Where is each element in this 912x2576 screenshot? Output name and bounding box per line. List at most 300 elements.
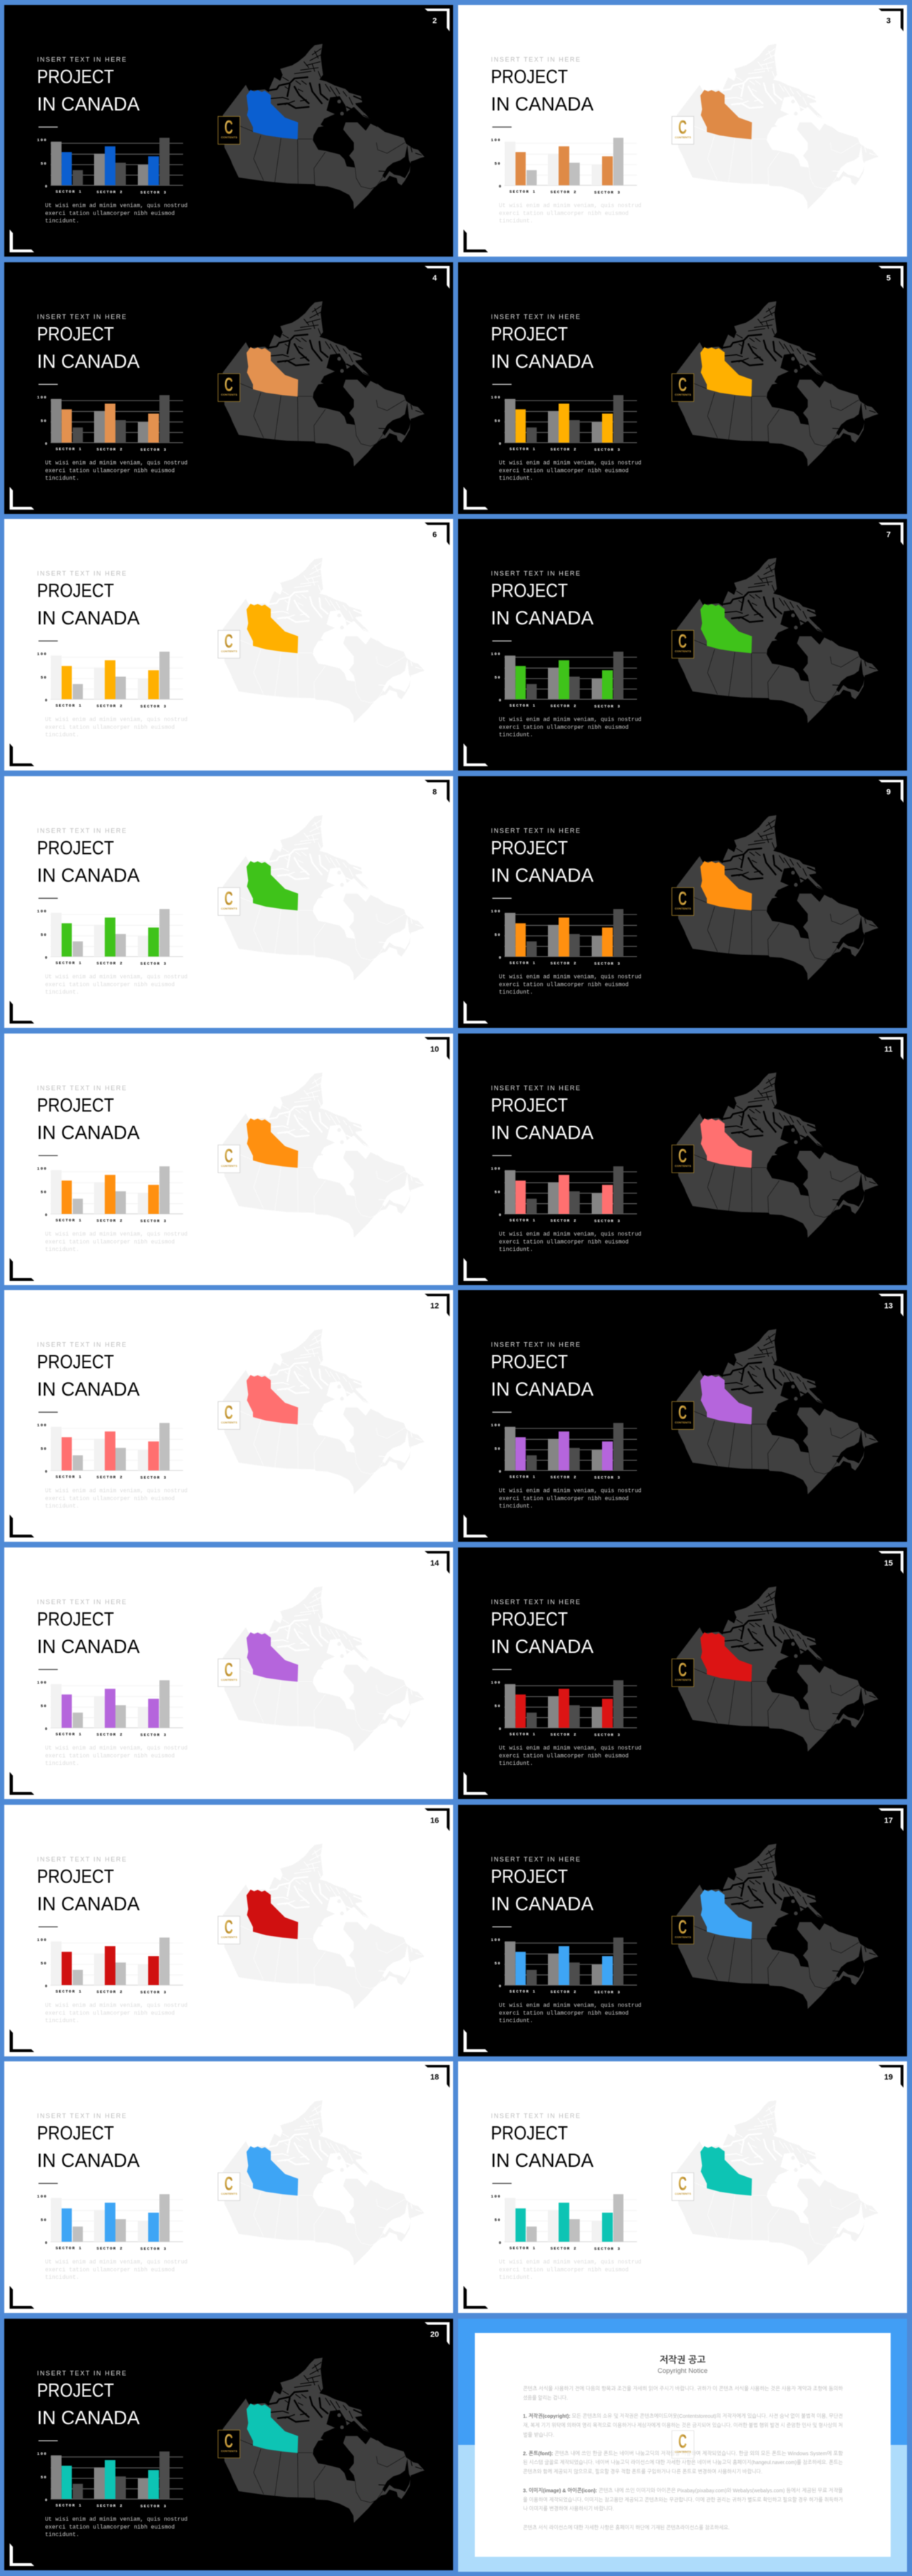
corner brackets and page number (10, 266, 450, 510)
body text (45, 2516, 188, 2538)
title: IN CANADA (491, 865, 594, 886)
title: IN CANADA (491, 2150, 594, 2171)
corner brackets and page number: 8 (432, 788, 437, 797)
eyebrow: INSERT TEXT IN HERE (37, 570, 126, 577)
copyright body text: 1. 저작권(copyright): 모든 콘텐츠의 소유 및 저작권은 콘텐츠에이드어웃(Contentstoreout)의 저작자에게 있습니다. 사전 승낙 없이 불법적 이용, 무단전 (523, 2413, 843, 2419)
bar chart (37, 1680, 183, 1738)
corner brackets and page number (10, 522, 450, 766)
title (37, 580, 140, 629)
body text (499, 1745, 642, 1767)
title: PROJECT (491, 323, 568, 344)
bar chart: 100 (37, 395, 47, 400)
body text (499, 1231, 642, 1253)
title: PROJECT (37, 66, 114, 88)
title (37, 1094, 140, 1143)
corner brackets and page number (463, 1294, 903, 1537)
bar chart: SECTOR 1 (56, 190, 82, 194)
title: IN CANADA (37, 607, 140, 629)
title: IN CANADA (37, 1893, 140, 1915)
logo badge: C (678, 116, 687, 138)
bar chart: 100 (491, 1680, 501, 1685)
logo badge: CONTENTS (675, 1421, 691, 1424)
bar chart: 50 (494, 1190, 501, 1195)
title (37, 323, 140, 372)
title: IN CANADA (491, 1636, 594, 1657)
bar chart: SECTOR 3 (140, 961, 167, 967)
body text: exerci tation ullamcorper nibh euismod (45, 468, 175, 474)
body text (499, 460, 642, 482)
corner brackets and page number: 9 (886, 788, 891, 797)
logo badge (218, 116, 240, 144)
logo badge (218, 2173, 240, 2201)
logo badge: CONTENTS (675, 135, 691, 139)
body text: tincidunt. (45, 2532, 79, 2538)
bar chart: SECTOR 3 (140, 1732, 167, 1738)
copyright body text: 재, 복제 기기 위탁에 의하여 영리 목적으로 이용하거나 제삼자에게 이용하는 것은 금지되어 있습니다. 이러한 불법 행위 발견 시 준엄한 민사 및 형사상의 처 (523, 2422, 843, 2428)
title: IN CANADA (37, 1636, 140, 1657)
map of Canada with highlighted region (223, 2101, 425, 2266)
panel: slide 15 dark red (458, 1547, 907, 1799)
title: PROJECT (37, 323, 114, 344)
corner brackets and page number (10, 9, 450, 252)
logo badge: C (678, 2173, 687, 2195)
eyebrow: INSERT TEXT IN HERE (37, 313, 126, 320)
bar chart: SECTOR 1 (56, 1732, 82, 1736)
title: IN CANADA (37, 1379, 140, 1400)
corner brackets and page number: 4 (432, 274, 437, 282)
bar chart: 0 (45, 698, 48, 703)
logo badge: C (678, 1145, 687, 1166)
title: PROJECT (37, 580, 114, 602)
bar chart: SECTOR 3 (594, 1218, 621, 1223)
bar chart: SECTOR 1 (509, 2246, 536, 2251)
title rule (38, 1155, 58, 1156)
logo badge (672, 1402, 694, 1430)
bar chart: 100 (491, 2194, 501, 2199)
eyebrow: INSERT TEXT IN HERE (491, 1855, 580, 1863)
bar chart (491, 1423, 637, 1480)
body text (499, 974, 642, 996)
bar chart: SECTOR 1 (56, 1217, 82, 1222)
logo badge (672, 1916, 694, 1944)
body text: tincidunt. (499, 1247, 533, 1253)
bar chart: SECTOR 3 (140, 2247, 167, 2252)
bar chart: SECTOR 2 (550, 447, 576, 452)
bar chart (491, 651, 637, 709)
bar chart: SECTOR 1 (56, 961, 82, 965)
corner brackets and page number (463, 1551, 903, 1795)
bar chart: 50 (494, 418, 501, 423)
bar chart: SECTOR 1 (509, 446, 536, 451)
bar chart: 100 (37, 1166, 47, 1171)
map of Canada with highlighted region (677, 301, 879, 466)
title: IN CANADA (37, 1122, 140, 1143)
logo badge (672, 631, 694, 659)
corner brackets and page number (463, 9, 903, 252)
title rule (492, 898, 512, 899)
bar chart: SECTOR 2 (550, 1218, 576, 1223)
title: PROJECT (37, 1609, 114, 1630)
corner brackets and page number (463, 780, 903, 1024)
copyright body text: 콘텐츠 서식을 사용하기 전에 다음의 항목과 조건을 자세히 읽어 주시기 바랍니다. 귀하가 이 콘텐츠 서식을 사용하는 것은 사용자 계약과 조항에 동의하 (523, 2386, 844, 2392)
copyright body text: 벌을 받습니다. (523, 2432, 554, 2438)
map of Canada with highlighted region (677, 44, 879, 209)
bar chart: SECTOR 2 (550, 704, 576, 709)
bar chart (491, 909, 637, 967)
bar chart: SECTOR 2 (550, 1475, 576, 1480)
title rule (38, 1412, 58, 1413)
bar chart: 0 (499, 441, 502, 446)
logo badge: CONTENTS (675, 393, 691, 396)
logo badge (672, 2431, 694, 2458)
body text (45, 1231, 188, 1253)
corner brackets and page number: 6 (432, 531, 437, 540)
body text (499, 2002, 642, 2024)
body text: exerci tation ullamcorper nibh euismod (45, 2525, 175, 2530)
logo badge: C (224, 373, 233, 395)
bar chart: 100 (491, 138, 501, 143)
body text: tincidunt. (499, 475, 533, 482)
eyebrow: INSERT TEXT IN HERE (37, 1598, 126, 1605)
bar chart: SECTOR 2 (550, 1732, 576, 1737)
title rule (492, 1669, 512, 1670)
title: PROJECT (37, 1351, 114, 1373)
bar chart: SECTOR 1 (509, 961, 536, 965)
map of Canada with highlighted region (223, 1072, 425, 1237)
bar chart: 100 (37, 1937, 47, 1942)
bar chart: SECTOR 2 (97, 704, 123, 709)
eyebrow: INSERT TEXT IN HERE (37, 827, 126, 834)
bar chart: SECTOR 1 (509, 190, 536, 194)
bar chart: 100 (37, 1423, 47, 1428)
body text: Ut wisi enim ad minim veniam, quis nostrud (45, 974, 188, 981)
bar chart: 50 (41, 418, 47, 423)
title (491, 66, 594, 115)
panel: slide 10 light bright orange (4, 1034, 453, 1285)
bar chart: 50 (494, 2217, 501, 2222)
title rule (492, 1926, 512, 1927)
body text: tincidunt. (45, 2018, 79, 2024)
title (491, 580, 594, 629)
bar chart: 0 (45, 1726, 48, 1731)
logo badge (672, 887, 694, 915)
logo badge: CONTENTS (675, 2192, 691, 2195)
title: PROJECT (491, 66, 568, 88)
bar chart: 50 (41, 1704, 47, 1709)
panel: slide 20 dark teal (4, 2319, 453, 2570)
map of Canada with highlighted region (677, 1843, 879, 2009)
eyebrow: INSERT TEXT IN HERE (37, 1084, 126, 1091)
logo badge (672, 373, 694, 401)
body text: tincidunt. (499, 2274, 533, 2281)
logo badge: CONTENTS (221, 1164, 237, 1168)
bar chart: SECTOR 1 (56, 2503, 82, 2508)
copyright heading: Copyright Notice (658, 2367, 708, 2375)
bar chart: 0 (499, 698, 502, 703)
bar chart: 50 (41, 932, 47, 937)
body text: exerci tation ullamcorper nibh euismod (45, 725, 175, 731)
bar chart: SECTOR 2 (550, 961, 576, 966)
body text: Ut wisi enim ad minim veniam, quis nostrud (499, 2260, 642, 2266)
body text: exerci tation ullamcorper nibh euismod (499, 1753, 629, 1759)
bar chart: 0 (499, 1984, 502, 1989)
copyright heading (658, 2354, 708, 2375)
logo badge: C (678, 631, 687, 652)
bar chart: SECTOR 2 (97, 190, 123, 195)
body text (45, 1488, 188, 1510)
bar chart: SECTOR 3 (594, 704, 621, 709)
copyright body text: 나 이미지를 변경하여 사용하시기 바랍니다. (523, 2505, 614, 2512)
map of Canada with highlighted region (223, 558, 425, 723)
body text: Ut wisi enim ad minim veniam, quis nostrud (45, 1745, 188, 1752)
corner brackets and page number (10, 1037, 450, 1281)
bar chart (37, 138, 183, 195)
logo badge: C (224, 1402, 233, 1423)
bar chart: 0 (45, 1212, 48, 1217)
title rule (38, 641, 58, 642)
body text: Ut wisi enim ad minim veniam, quis nostrud (499, 202, 642, 210)
logo badge: CONTENTS (221, 1678, 237, 1681)
logo badge: C (678, 1402, 687, 1423)
eyebrow: INSERT TEXT IN HERE (491, 1084, 580, 1091)
bar chart: SECTOR 2 (550, 1989, 576, 1994)
body text: Ut wisi enim ad minim veniam, quis nostrud (499, 460, 642, 466)
bar chart: SECTOR 3 (594, 447, 621, 452)
body text: exerci tation ullamcorper nibh euismod (499, 1496, 629, 1503)
body text: exerci tation ullamcorper nibh euismod (499, 468, 629, 474)
body text (45, 2260, 188, 2281)
bar chart: SECTOR 1 (56, 704, 82, 709)
title: IN CANADA (37, 351, 140, 372)
body text: exerci tation ullamcorper nibh euismod (499, 2267, 629, 2274)
eyebrow: INSERT TEXT IN HERE (37, 1341, 126, 1349)
body text (45, 974, 188, 996)
title: PROJECT (37, 1094, 114, 1116)
bar chart: SECTOR 1 (56, 1475, 82, 1480)
corner brackets and page number (10, 780, 450, 1024)
copyright body text: 2. 폰트(font): 콘텐츠 내에 쓰인 한글 폰트는 네이버 나눔고딕의 저작물을 사용하여 제작되었습니다. 한글 외의 모든 폰트는 Windows System에 포함 (523, 2451, 844, 2457)
eyebrow: INSERT TEXT IN HERE (491, 2113, 580, 2120)
bar chart: SECTOR 3 (140, 447, 167, 452)
bar chart (37, 395, 183, 452)
title (37, 1865, 140, 1915)
bar chart (491, 2194, 637, 2252)
bar chart: SECTOR 3 (594, 1989, 621, 1994)
bar chart: 100 (37, 909, 47, 914)
bar chart: 100 (491, 395, 501, 400)
body text: tincidunt. (499, 1503, 533, 1510)
body text: exerci tation ullamcorper nibh euismod (45, 1239, 175, 1245)
bar chart: SECTOR 1 (56, 2246, 82, 2251)
title (37, 2123, 140, 2171)
bar chart: SECTOR 1 (509, 1217, 536, 1222)
title rule (38, 1926, 58, 1927)
bar chart: 100 (37, 1680, 47, 1685)
bar chart: 0 (45, 1469, 48, 1474)
panel: slide 17 dark sky blue (458, 1805, 907, 2056)
eyebrow: INSERT TEXT IN HERE (37, 1855, 126, 1863)
body text: Ut wisi enim ad minim veniam, quis nostrud (499, 2002, 642, 2009)
body text: tincidunt. (499, 989, 533, 996)
bar chart (37, 1423, 183, 1480)
body text: Ut wisi enim ad minim veniam, quis nostrud (45, 202, 188, 210)
title: PROJECT (491, 1865, 568, 1887)
bar chart: SECTOR 2 (97, 447, 123, 452)
panel: slide 9 dark bright orange (458, 776, 907, 1028)
body text: Ut wisi enim ad minim veniam, quis nostrud (499, 1231, 642, 1237)
logo badge: CONTENTS (221, 393, 237, 396)
body text: Ut wisi enim ad minim veniam, quis nostrud (45, 717, 188, 723)
title: IN CANADA (37, 2407, 140, 2428)
title rule (38, 898, 58, 899)
bar chart: SECTOR 3 (140, 1989, 167, 1994)
copyright body text: 셨음을 알리는 겁니다. (523, 2395, 568, 2401)
bar chart: SECTOR 3 (140, 704, 167, 709)
map of Canada with highlighted region (223, 1843, 425, 2009)
panel: slide 2 dark blue (4, 5, 453, 257)
bar chart: SECTOR 3 (140, 190, 167, 195)
bar chart: SECTOR 1 (56, 446, 82, 451)
bar chart: 50 (494, 675, 501, 680)
bar chart: 50 (494, 1446, 501, 1451)
map of Canada with highlighted region (223, 815, 425, 980)
bar chart: SECTOR 2 (550, 2246, 576, 2251)
logo badge (218, 631, 240, 659)
copyright body text: 콘텐츠와 함께 제공되지 않으므로, 필요할 경우 적합 폰트를 구입하거나 다른 폰트로 변경하여 사용하시기 바랍니다. (523, 2468, 762, 2475)
logo badge: C (678, 1916, 687, 1937)
title: PROJECT (491, 1351, 568, 1373)
body text: exerci tation ullamcorper nibh euismod (45, 211, 175, 217)
corner brackets and page number: 12 (430, 1302, 439, 1311)
bar chart: SECTOR 2 (97, 1732, 123, 1737)
body text: Ut wisi enim ad minim veniam, quis nostrud (45, 1231, 188, 1237)
body text: tincidunt. (45, 475, 79, 482)
panel: slide 8 light green (4, 776, 453, 1028)
bar chart: 100 (37, 2451, 47, 2456)
bar chart: SECTOR 2 (97, 1475, 123, 1480)
body text: exerci tation ullamcorper nibh euismod (499, 2010, 629, 2016)
bar chart (491, 1166, 637, 1223)
body text: tincidunt. (499, 218, 533, 225)
corner brackets and page number: 3 (886, 17, 891, 26)
bar chart: 100 (491, 1166, 501, 1171)
title (491, 323, 594, 372)
corner brackets and page number: 15 (884, 1560, 893, 1568)
logo badge (218, 1916, 240, 1944)
body text: Ut wisi enim ad minim veniam, quis nostrud (45, 2002, 188, 2009)
title rule (492, 383, 512, 385)
body text: exerci tation ullamcorper nibh euismod (499, 1239, 629, 1245)
logo badge: C (224, 887, 233, 909)
logo badge: C (224, 116, 233, 138)
corner brackets and page number: 14 (430, 1560, 440, 1568)
map of Canada with highlighted region (677, 1329, 879, 1495)
logo badge: C (678, 2431, 687, 2452)
bar chart: SECTOR 1 (509, 1732, 536, 1736)
title (37, 1351, 140, 1400)
title (491, 1865, 594, 1915)
panel: slide 18 light sky blue (4, 2061, 453, 2313)
bar chart: 50 (494, 1704, 501, 1709)
bar chart: 0 (499, 184, 502, 189)
logo badge (672, 1145, 694, 1173)
body text: exerci tation ullamcorper nibh euismod (45, 2010, 175, 2016)
map of Canada with highlighted region (223, 1587, 425, 1751)
logo badge: CONTENTS (675, 2450, 691, 2453)
bar chart: 0 (499, 1212, 502, 1217)
title: PROJECT (491, 1609, 568, 1630)
title rule (492, 127, 512, 128)
panel: slide 14 light purple (4, 1547, 453, 1799)
bar chart (37, 651, 183, 709)
bar chart: SECTOR 3 (140, 1218, 167, 1223)
panel: slide 6 light yellow (4, 519, 453, 771)
body text: Ut wisi enim ad minim veniam, quis nostrud (499, 717, 642, 723)
body text: Ut wisi enim ad minim veniam, quis nostrud (499, 974, 642, 981)
title: PROJECT (491, 838, 568, 859)
bar chart: SECTOR 3 (594, 961, 621, 967)
corner brackets and page number: 18 (430, 2073, 439, 2082)
title rule (492, 2183, 512, 2184)
logo badge: CONTENTS (675, 907, 691, 910)
body text: Ut wisi enim ad minim veniam, quis nostrud (45, 460, 188, 466)
map of Canada with highlighted region (677, 558, 879, 723)
bar chart: 50 (494, 1961, 501, 1966)
logo badge (672, 2173, 694, 2201)
title: PROJECT (37, 2123, 114, 2144)
logo badge: CONTENTS (221, 2192, 237, 2195)
map of Canada with highlighted region (677, 815, 879, 980)
body text: tincidunt. (45, 1761, 79, 1767)
body text: exerci tation ullamcorper nibh euismod (499, 982, 629, 988)
body text: tincidunt. (499, 1761, 533, 1767)
title rule (38, 383, 58, 385)
logo badge: C (224, 1659, 233, 1680)
logo badge (218, 1402, 240, 1430)
bar chart (491, 395, 637, 452)
logo badge (218, 2430, 240, 2458)
body text: exerci tation ullamcorper nibh euismod (45, 1496, 175, 1503)
bar chart: 100 (491, 1423, 501, 1428)
bar chart: 0 (45, 955, 48, 960)
eyebrow: INSERT TEXT IN HERE (491, 313, 580, 320)
bar chart (37, 1937, 183, 1994)
logo badge: CONTENTS (675, 649, 691, 653)
title rule (38, 1669, 58, 1670)
map of Canada with highlighted region (677, 1587, 879, 1751)
corner brackets and page number (10, 1294, 450, 1537)
title: IN CANADA (491, 1893, 594, 1915)
corner brackets and page number (10, 1551, 450, 1795)
eyebrow: INSERT TEXT IN HERE (491, 56, 580, 63)
corner brackets and page number: 20 (430, 2331, 439, 2339)
bar chart: SECTOR 2 (97, 2503, 123, 2508)
two-tone blue background (458, 2319, 907, 2572)
title (37, 838, 140, 886)
title (491, 1609, 594, 1657)
bar chart: 50 (41, 675, 47, 680)
body text: exerci tation ullamcorper nibh euismod (45, 2267, 175, 2274)
logo badge: C (678, 373, 687, 395)
logo badge: CONTENTS (221, 2449, 237, 2453)
bar chart: 100 (491, 909, 501, 914)
bar chart: 50 (41, 161, 47, 166)
logo badge: CONTENTS (675, 1935, 691, 1939)
bar chart: SECTOR 2 (97, 2246, 123, 2251)
bar chart (37, 2451, 183, 2509)
body text: tincidunt. (45, 2274, 79, 2281)
title: PROJECT (37, 2380, 114, 2401)
